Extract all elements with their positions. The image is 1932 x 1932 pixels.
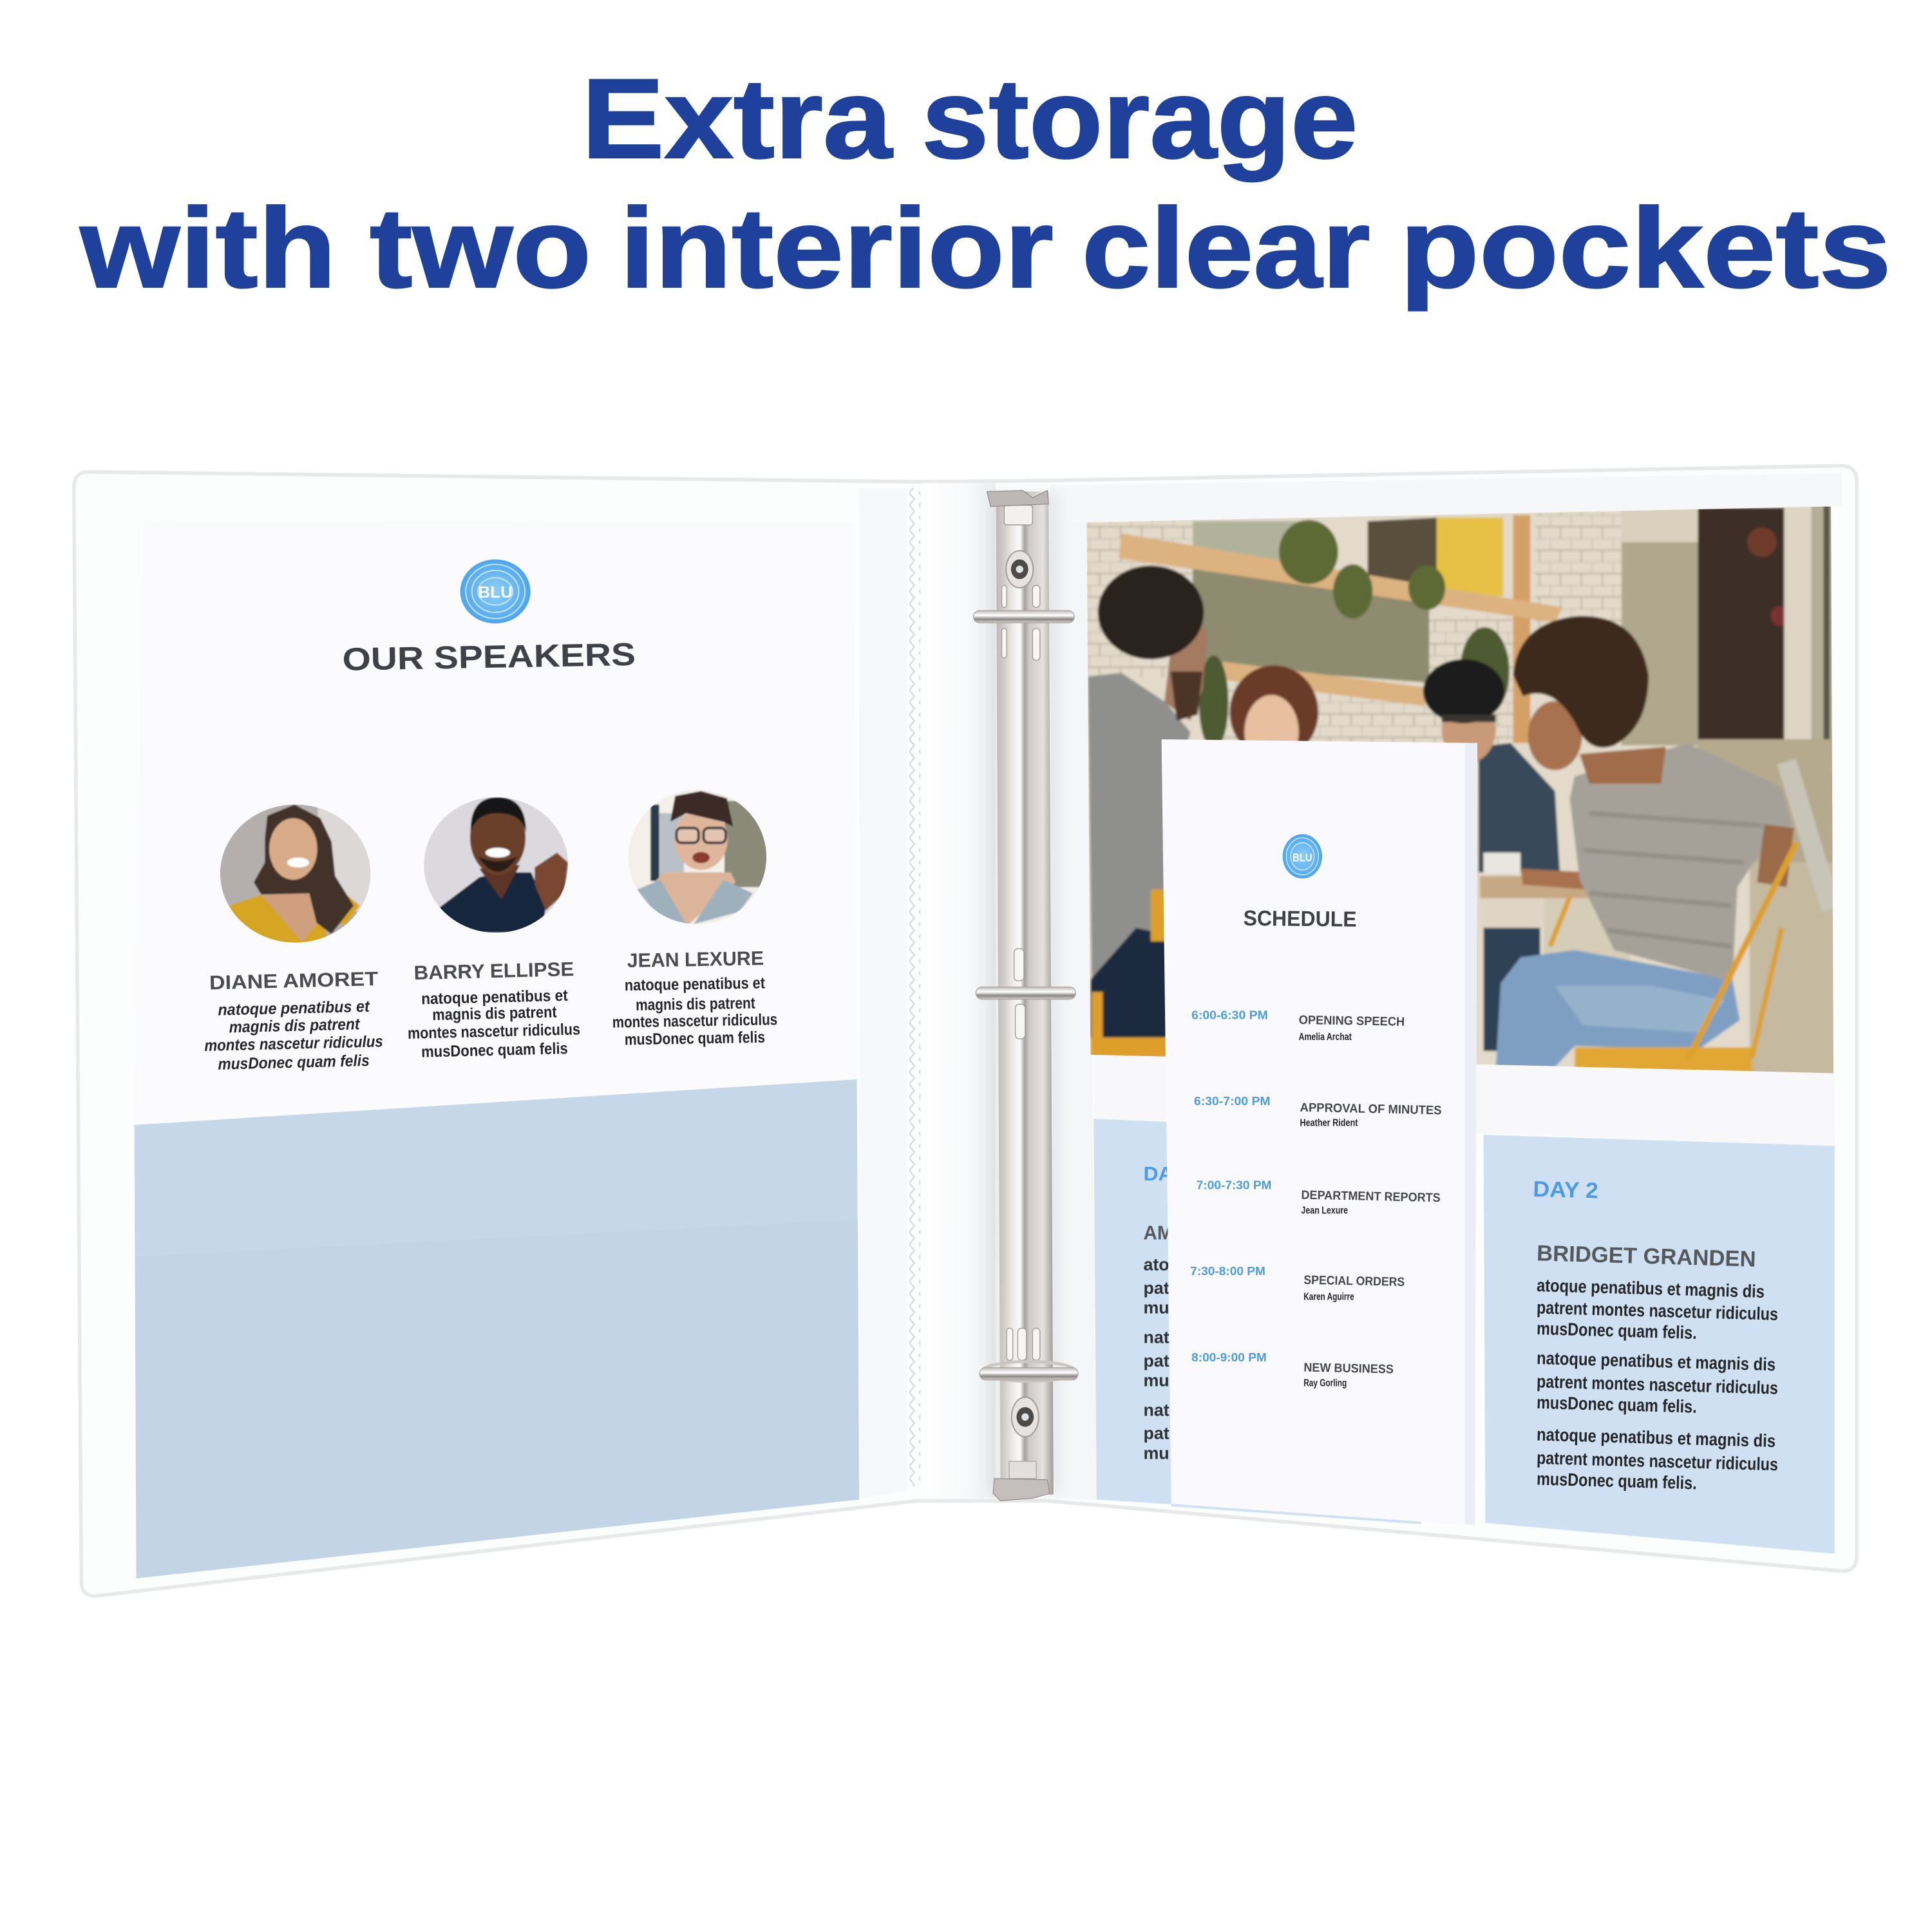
title: with [79,185,336,312]
heading: our speakers: OUR SPEAKERS [342,636,636,677]
partly hidden day 1 text [1144,1163,1173,1463]
speaker bio: diane: magnis dis patrent [229,1015,361,1036]
portrait: barry ellipse [419,795,573,936]
ring top [973,611,1074,623]
left blue panel [1094,1119,1466,1523]
schedule times: 6:00-6:30 PM [1191,1009,1268,1021]
cafe photo [1078,499,1842,1084]
speaker bio: diane: montes nascetur ridiculus [204,1032,383,1055]
card bottom edge [1171,1505,1421,1523]
partly hidden day 1 text: mu [1144,1298,1170,1318]
day 2 heading: DAY 2 [1533,1177,1598,1203]
left margin shade [859,488,907,1499]
photo: background wall and window [1078,505,1836,1078]
day 2 blue panel [1484,1135,1835,1554]
title: pockets [1399,185,1891,312]
speaker bio: jean: magnis dis patrent [636,994,755,1014]
speaker bio: barry: musDonec quam felis [421,1039,568,1061]
right pocket top [1050,473,1842,522]
rail shadow [988,493,1059,1493]
partly hidden day 1 text: nat [1144,1400,1170,1419]
partly hidden day 1 text: ato [1144,1255,1170,1274]
day 2 body text [1537,1275,1778,1493]
day 2 body text: natoque penatibus et magnis dis [1537,1348,1776,1374]
heading: schedule: SCHEDULE [1243,907,1357,932]
schedule events: SPECIAL ORDERS [1303,1274,1405,1289]
icon: blu logo [460,560,531,623]
speaker name: barry ellipse: BARRY ELLIPSE [413,958,574,984]
portrait: diane amoret [220,804,371,943]
schedule events [1298,1014,1442,1376]
pocket pleat [909,488,920,1486]
card spine crease [1465,743,1477,1526]
speaker bio: diane: musDonec quam felis [218,1052,370,1074]
top tab [987,490,1048,506]
day 2 body text: musDonec quam felis. [1537,1468,1697,1493]
speaker bio: barry [408,987,580,1061]
ring mechanism [973,490,1078,1501]
schedule presenters: Ray Gorling [1303,1378,1347,1388]
speaker bio: barry: natoque penatibus et [421,987,568,1008]
schedule times: 8:00-9:00 PM [1191,1351,1267,1364]
schedule presenters: Jean Lexure [1301,1206,1348,1217]
title: storage [922,56,1358,182]
photo: shelves [1119,533,1562,706]
day 2 body text: musDonec quam felis. [1537,1392,1697,1417]
panel: schedule card [1162,739,1477,1526]
schedule presenters: Amelia Archat [1299,1032,1352,1043]
partly hidden day 1 text: pat [1144,1278,1170,1298]
day 2 body text: patrent montes nascetur ridiculus [1537,1448,1778,1474]
partly hidden day 1 text: mu [1144,1443,1170,1463]
icon: blu logo small [1283,834,1322,878]
sheet white top [135,521,857,1125]
photo: yellow chair [1550,761,1831,1072]
day 2 body text: atoque penatibus et magnis dis [1537,1275,1765,1302]
rail slots top [1001,585,1040,1360]
speaker name: jean lexure: JEAN LEXURE [627,947,764,972]
photo: man in grey [1088,565,1208,1057]
partly hidden day 1 text: AM [1144,1222,1173,1244]
day 2 body text: patrent montes nascetur ridiculus [1537,1298,1778,1324]
schedule events: DEPARTMENT REPORTS [1301,1189,1441,1205]
title: clear [1082,185,1370,312]
title [79,56,1891,312]
binder [74,466,1857,1596]
partly hidden day 1 text: DA [1144,1163,1173,1185]
partly hidden day 1 text: pat [1144,1351,1170,1370]
panel: our speakers sheet [135,521,859,1578]
title: interior [620,185,1054,312]
ring bottom [980,1361,1078,1381]
photo: woman in sweater [1496,616,1794,1067]
binder gutter [922,483,996,1499]
speaker bio: diane [204,998,383,1074]
ring middle [976,987,1075,999]
icon: blu logo: BLU [478,583,513,601]
schedule times: 6:30-7:00 PM [1194,1095,1271,1108]
sheet blue bottom [135,1079,859,1578]
photo: plants [1199,520,1510,749]
partly hidden day 1 text: pat [1144,1424,1170,1443]
schedule presenters: Karen Aguirre [1303,1291,1354,1302]
photo: table [1480,853,1630,1051]
partly hidden day 1 text: nat [1144,1327,1170,1347]
schedule presenters [1299,1032,1358,1388]
speaker bio: barry: montes nascetur ridiculus [408,1020,580,1043]
schedule times: 7:00-7:30 PM [1197,1179,1271,1191]
schedule times [1190,1009,1271,1364]
speaker bio: jean [612,974,777,1048]
title: two [370,185,591,312]
schedule times: 7:30-8:00 PM [1190,1265,1265,1278]
speaker name: diane amoret: DIANE AMORET [209,968,379,994]
bottom neck [1009,1461,1036,1479]
bottom tab [993,1479,1050,1501]
speaker bio: diane: natoque penatibus et [218,998,371,1019]
day 2 body text: patrent montes nascetur ridiculus [1537,1371,1778,1398]
panel: right sheet [1078,499,1842,1554]
schedule presenters: Heather Rident [1300,1118,1358,1129]
day 2 speaker name: BRIDGET GRANDEN [1537,1241,1756,1272]
partly hidden day 1 text: mu [1144,1370,1170,1390]
speaker bio: barry: magnis dis patrent [432,1003,557,1024]
schedule events: OPENING SPEECH [1298,1014,1405,1029]
photo: woman centre [1229,665,1318,769]
schedule events: NEW BUSINESS [1303,1361,1394,1376]
card body [1162,739,1477,1526]
bottom rivet [1012,1397,1039,1437]
title: Extra [582,56,893,182]
sheet white [1087,506,1835,1146]
rail [996,491,1054,1495]
rail neck top [1004,505,1032,525]
photo: man with hat [1423,659,1560,873]
top rivet [1006,551,1033,588]
schedule events: APPROVAL OF MINUTES [1300,1101,1442,1117]
right inner panel [1050,486,1097,1499]
binder cover [74,466,1857,1596]
speaker bio: jean: musDonec quam felis [625,1028,765,1048]
day 2 body text: natoque penatibus et magnis dis [1537,1425,1776,1451]
icon: blu logo small: BLU [1293,851,1312,864]
clear pocket tint [135,1220,859,1578]
day 2 body text: musDonec quam felis. [1537,1318,1697,1343]
speaker bio: jean: natoque penatibus et [625,974,765,994]
speaker bio: jean: montes nascetur ridiculus [612,1010,777,1032]
portrait: jean lexure [626,788,769,927]
